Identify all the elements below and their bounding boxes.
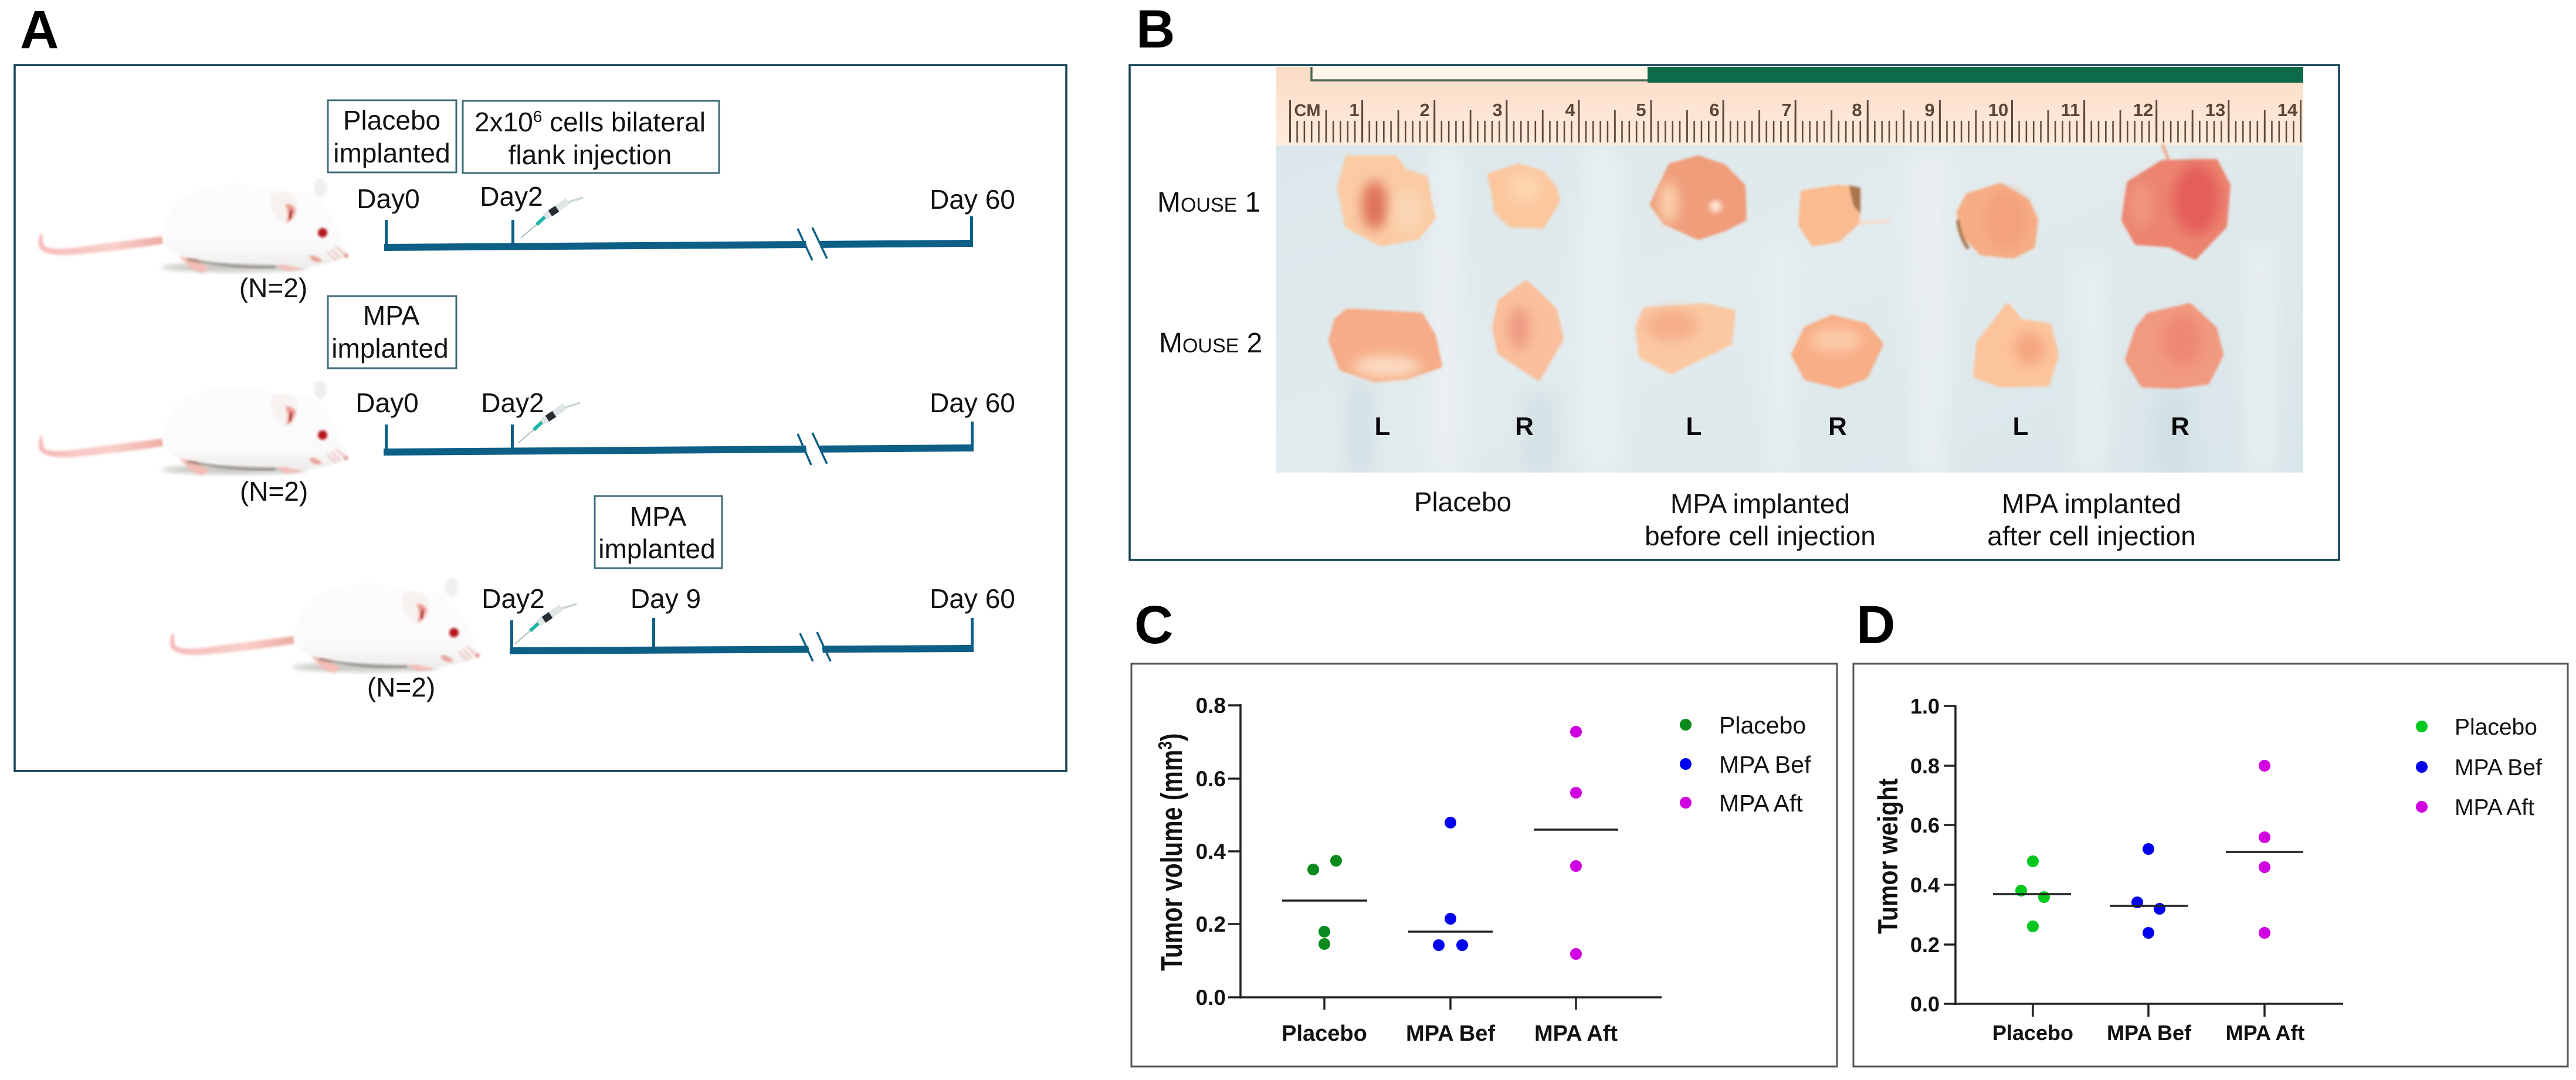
points: MPA after xyxy=(1570,726,1582,960)
photo: ruler: 11 xyxy=(2061,100,2080,120)
axes xyxy=(1228,704,1662,1010)
x category labels xyxy=(1282,1021,1618,1046)
y tick labels: 0.2 xyxy=(1196,912,1226,936)
text: N=2 group 1: (N=2) xyxy=(239,273,307,303)
icon: syringe 1 xyxy=(521,198,583,237)
text: N=2 group 3: (N=2) xyxy=(367,672,435,702)
text box: cells bilateral flank injection xyxy=(463,101,719,173)
photo: ruler: 9 xyxy=(1924,100,1935,120)
photo: ruler: 10 xyxy=(1988,100,2008,120)
x category labels: Placebo xyxy=(1992,1021,2073,1045)
text: side labels L R: R xyxy=(1515,412,1534,441)
photo: cloth background xyxy=(1276,145,2303,473)
timeline 1: Day 60 xyxy=(930,184,1015,215)
photo: ruler: CM xyxy=(1294,101,1321,120)
timeline 1: Day0 xyxy=(357,184,420,214)
text: row label mouse 2: Mouse 2 xyxy=(1159,328,1262,359)
panel D: tumor weight chart xyxy=(1853,664,2568,1067)
y tick labels: 0.6 xyxy=(1910,813,1940,837)
text box: MPA implanted group 2: MPA xyxy=(363,300,419,331)
legend xyxy=(1680,712,1811,817)
text: side labels L R: R xyxy=(2171,412,2189,441)
legend: MPA Bef xyxy=(2455,755,2542,780)
y tick labels: 0.4 xyxy=(1196,840,1226,864)
label: panel A letter: A xyxy=(20,0,59,60)
icon: syringe 2 xyxy=(518,403,580,443)
caption: MPA after: after cell injection xyxy=(1987,521,2196,551)
legend: MPA Bef xyxy=(1719,751,1811,778)
y tick labels: 0.6 xyxy=(1196,767,1226,791)
photo: tumors mouse 2 xyxy=(1331,283,2221,386)
caption: MPA before xyxy=(1645,488,1876,551)
y tick labels: 0.8 xyxy=(1910,754,1940,778)
x category labels: MPA Aft xyxy=(1534,1021,1618,1046)
y axis title: ) xyxy=(1155,733,1188,741)
photo: ruler: 4 xyxy=(1565,100,1575,120)
mean lines xyxy=(1993,852,2303,906)
x category labels: MPA Bef xyxy=(1406,1021,1495,1046)
text: side labels L R xyxy=(1375,412,2189,441)
text box: MPA implanted group 3: implanted xyxy=(598,534,716,564)
timeline 1 xyxy=(357,181,1015,260)
legend xyxy=(2416,715,2542,820)
timeline 2: Day0 xyxy=(355,388,419,418)
photo: ruler: 12 xyxy=(2133,100,2153,120)
points: MPA after xyxy=(2259,760,2270,939)
y tick labels: 0.0 xyxy=(1910,992,1940,1016)
text: side labels L R: L xyxy=(1686,412,1701,441)
label: panel D letter: D xyxy=(1856,595,1895,655)
photo: ruler: 6 xyxy=(1709,100,1720,120)
mean lines xyxy=(1282,830,1618,932)
timeline 3: Day 60 xyxy=(930,583,1015,614)
y tick labels: 1.0 xyxy=(1910,694,1940,718)
photo: ruler: 7 xyxy=(1781,100,1792,120)
legend: MPA Aft xyxy=(1719,790,1803,817)
y tick labels: 0.8 xyxy=(1196,694,1226,718)
y tick labels xyxy=(1196,694,1226,1010)
photo: ruler: 3 xyxy=(1492,100,1503,120)
y tick labels: 0.2 xyxy=(1910,933,1940,957)
caption: MPA after xyxy=(1987,488,2196,551)
text box: cells bilateral flank injection: 6 xyxy=(533,107,542,125)
panel A: experimental timelines xyxy=(15,65,1066,771)
panel C: tumor volume chart xyxy=(1131,664,1837,1067)
icon: mouse 1 xyxy=(39,178,348,273)
caption: MPA before: MPA implanted xyxy=(1670,488,1850,519)
photo: ruler: 2 xyxy=(1419,100,1430,120)
text: row label mouse 1: Mouse 1 xyxy=(1157,187,1260,218)
photo: ruler: 13 xyxy=(2205,100,2225,120)
icon: mouse 2 xyxy=(39,381,348,476)
photo: ruler: 5 xyxy=(1636,100,1646,120)
y axis title: Tumor volume (mm xyxy=(1155,750,1188,971)
points: MPA before xyxy=(1433,817,1468,951)
timeline 2: Day 60 xyxy=(930,388,1015,418)
photo: ruler: 8 xyxy=(1852,100,1862,120)
x category labels: MPA Aft xyxy=(2226,1021,2304,1045)
timeline 2 xyxy=(355,388,1015,465)
timeline 3: Day2 xyxy=(482,583,545,614)
icon: mouse 3 xyxy=(170,578,480,673)
y tick labels: 0.0 xyxy=(1196,986,1226,1010)
text box: cells bilateral flank injection: flank injection xyxy=(509,140,672,170)
text: side labels L R: L xyxy=(2013,412,2028,441)
panel B: tumor photo xyxy=(1130,65,2339,560)
caption: placebo: Placebo xyxy=(1414,487,1511,517)
y tick labels: 0.4 xyxy=(1910,873,1940,897)
text: side labels L R: L xyxy=(1375,412,1390,441)
caption: MPA before: before cell injection xyxy=(1645,521,1876,551)
timeline 1: Day2 xyxy=(480,181,543,212)
photo: ruler: 1 xyxy=(1349,100,1360,120)
legend: Placebo xyxy=(2455,715,2537,740)
icon: syringe 3 xyxy=(515,604,577,644)
legend: Placebo xyxy=(1719,712,1806,739)
y axis title: 3 xyxy=(1155,741,1176,750)
x category labels: MPA Bef xyxy=(2107,1021,2192,1045)
photo: tumors mouse 1 xyxy=(1340,144,2228,257)
x category labels xyxy=(1992,1021,2304,1045)
text box: Placebo implanted xyxy=(328,100,456,172)
text box: MPA implanted group 2: implanted xyxy=(331,333,449,364)
timeline 3 xyxy=(482,583,1015,661)
photo: ruler: 14 xyxy=(2277,100,2298,120)
points: placebo xyxy=(2015,855,2050,932)
photo: ruler xyxy=(1276,67,2303,145)
text box: cells bilateral flank injection: 2x10 xyxy=(474,107,533,137)
y tick labels xyxy=(1910,694,1940,1016)
label: panel B letter: B xyxy=(1136,0,1175,59)
x category labels: Placebo xyxy=(1282,1021,1367,1046)
points: MPA before xyxy=(2131,843,2165,939)
timeline 2: Day2 xyxy=(481,388,544,418)
text box: Placebo implanted: Placebo xyxy=(343,105,440,135)
text box: cells bilateral flank injection: cells bilateral xyxy=(542,107,706,137)
text: side labels L R: R xyxy=(1828,412,1847,441)
label: panel C letter: C xyxy=(1134,595,1173,655)
axes xyxy=(1944,705,2343,1017)
timeline 3: Day 9 xyxy=(631,583,701,614)
text: N=2 group 2: (N=2) xyxy=(240,476,308,507)
legend: MPA Aft xyxy=(2455,795,2534,820)
y axis title: Tumor weight xyxy=(1873,778,1904,934)
text box: Placebo implanted: implanted xyxy=(333,138,450,168)
text box: MPA implanted group 2 xyxy=(328,296,456,368)
points: placebo xyxy=(1307,855,1342,950)
caption: MPA after: MPA implanted xyxy=(2002,488,2181,519)
text box: MPA implanted group 3: MPA xyxy=(630,501,686,532)
text box: MPA implanted group 3 xyxy=(595,496,722,568)
